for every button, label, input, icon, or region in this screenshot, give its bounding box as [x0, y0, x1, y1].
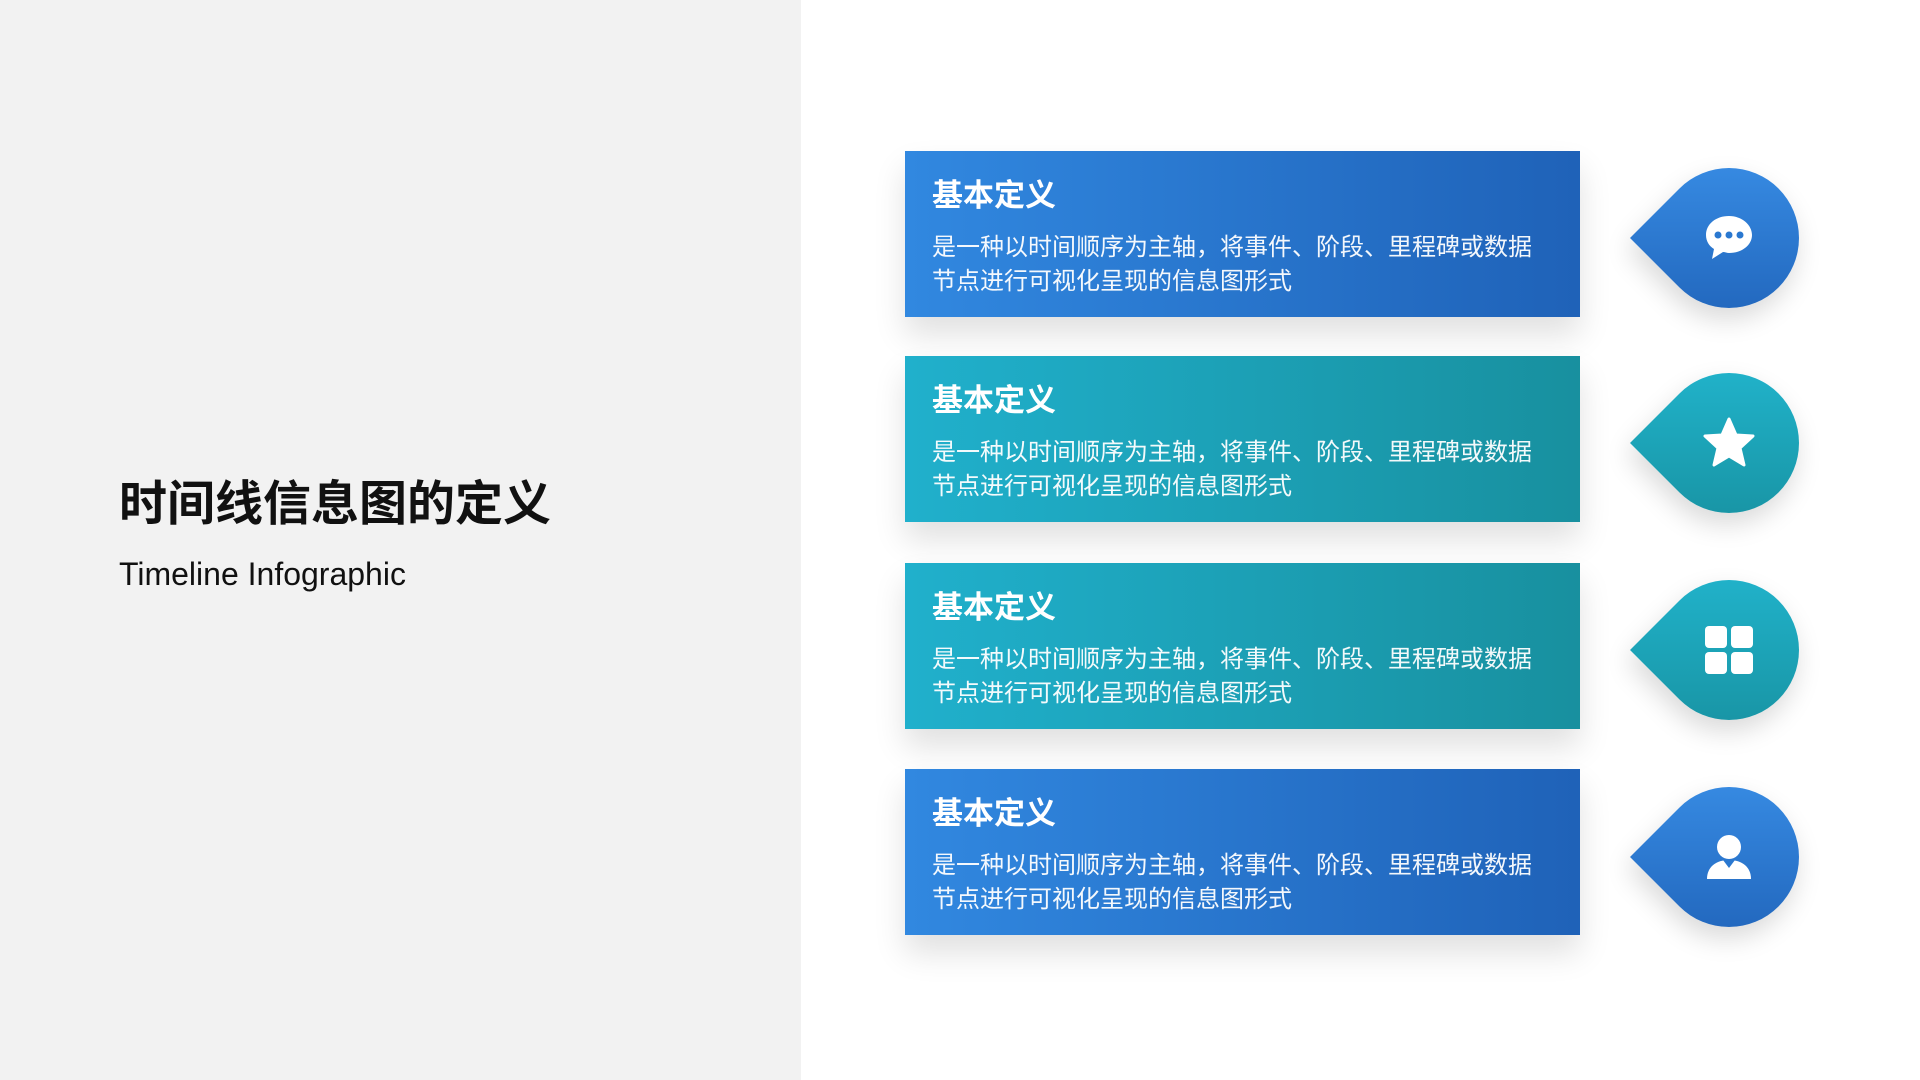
icon: grid	[1705, 626, 1753, 674]
card 2	[905, 356, 1580, 522]
card 2: 节点进行可视化呈现的信息图形式	[932, 473, 1292, 500]
marker 2	[1630, 344, 1828, 542]
card 1: 基本定义	[932, 178, 1056, 213]
card 4	[905, 769, 1580, 935]
card 1: 是一种以时间顺序为主轴，将事件、阶段、里程碑或数据	[932, 234, 1532, 261]
card 4: 基本定义	[932, 796, 1056, 831]
card 1: 节点进行可视化呈现的信息图形式	[932, 268, 1292, 295]
marker 4	[1630, 758, 1828, 956]
card 3	[905, 563, 1580, 729]
marker 3	[1630, 551, 1828, 749]
card 3: 是一种以时间顺序为主轴，将事件、阶段、里程碑或数据	[932, 646, 1532, 673]
card 1	[905, 151, 1580, 317]
card 4: 节点进行可视化呈现的信息图形式	[932, 886, 1292, 913]
marker 1	[1630, 139, 1828, 337]
card 2: 基本定义	[932, 383, 1056, 418]
icon: star	[1703, 418, 1754, 467]
icon: user	[1707, 835, 1751, 879]
card 4: 是一种以时间顺序为主轴，将事件、阶段、里程碑或数据	[932, 852, 1532, 879]
card 3: 节点进行可视化呈现的信息图形式	[932, 680, 1292, 707]
subtitle: Timeline Infographic	[119, 556, 406, 592]
panel: left background	[0, 0, 801, 1080]
card 3: 基本定义	[932, 590, 1056, 625]
icon: chat bubble	[1706, 216, 1752, 259]
title: 时间线信息图的定义	[119, 478, 551, 531]
card 2: 是一种以时间顺序为主轴，将事件、阶段、里程碑或数据	[932, 439, 1532, 466]
